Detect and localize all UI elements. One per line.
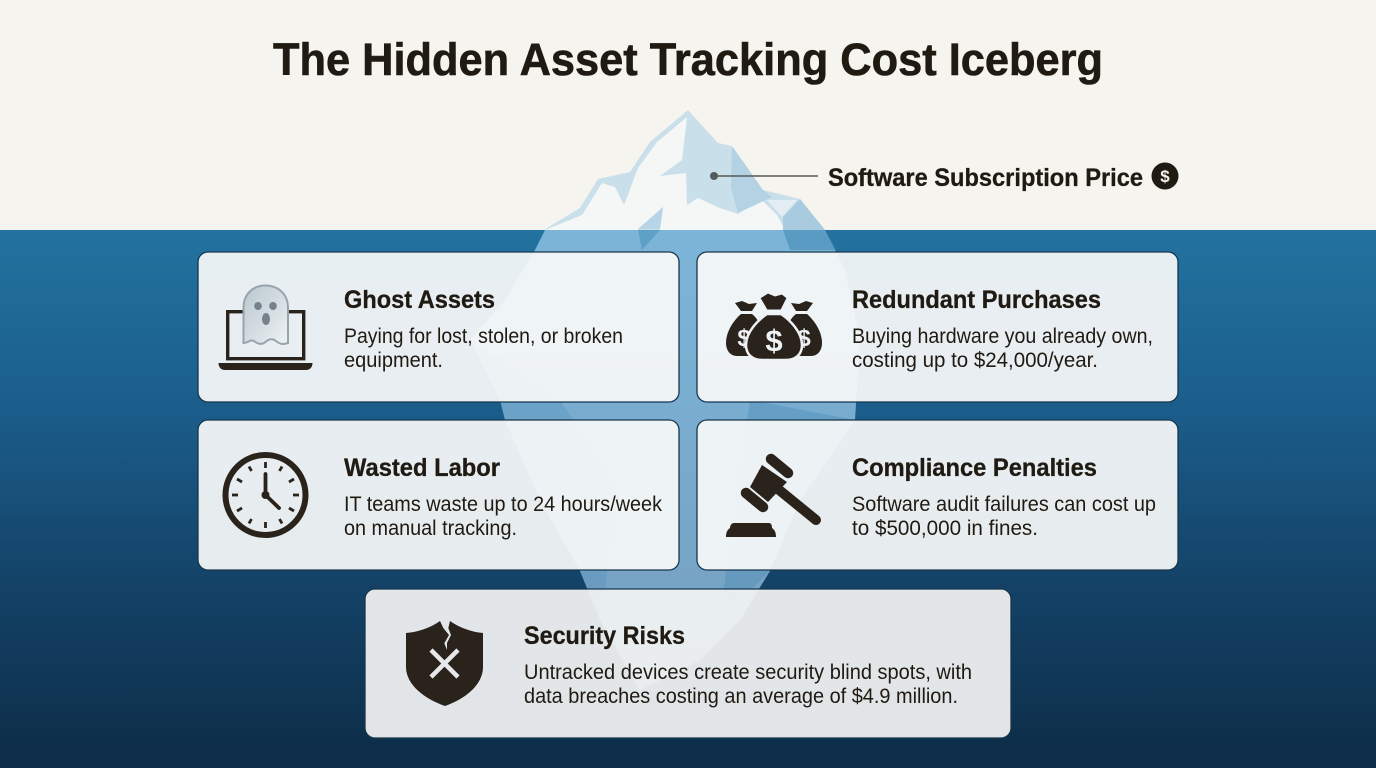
heading: compliance penalties: Compliance Penalties <box>852 454 1097 482</box>
heading: redundant purchases: Redundant Purchases <box>852 286 1101 314</box>
panel: security risks <box>365 589 1011 738</box>
sky background <box>0 0 1376 230</box>
icon: money bags: $ <box>797 325 811 352</box>
text: compliance penalties description: Software audit failures can cost up <box>852 492 1156 516</box>
icon: money bags <box>726 293 822 360</box>
panel: redundant purchases <box>697 252 1178 402</box>
heading: wasted labor: Wasted Labor <box>344 454 500 482</box>
heading: security risks: Security Risks <box>524 622 685 650</box>
panel: wasted labor <box>198 420 679 570</box>
text: wasted labor description: IT teams waste up to 24 hours/week <box>344 492 662 516</box>
icon: clock <box>226 455 306 535</box>
title: The Hidden Asset Tracking Cost Iceberg <box>273 34 1103 85</box>
callout label: Software Subscription Price <box>828 164 1143 192</box>
icon: dollar badge: $ <box>1160 167 1170 186</box>
callout: software subscription price <box>710 162 1178 192</box>
iceberg illustration <box>470 110 860 690</box>
callout dot and leader line <box>710 172 818 180</box>
panel: compliance penalties <box>697 420 1178 570</box>
icon: dollar badge <box>1152 162 1178 190</box>
panel: ghost assets <box>198 252 679 402</box>
iceberg above water <box>545 110 825 230</box>
ocean background <box>0 230 1376 768</box>
text: ghost assets description: equipment. <box>344 348 443 372</box>
icon: money bags: $ <box>765 323 783 358</box>
iceberg below water <box>470 230 860 690</box>
text: security risks description: data breaches costing an average of $4.9 million. <box>524 684 958 708</box>
icon: money bags: $ <box>737 325 751 352</box>
heading: ghost assets: Ghost Assets <box>344 286 495 314</box>
text: redundant purchases description: costing up to $24,000/year. <box>852 348 1098 372</box>
text: wasted labor description: on manual tracking. <box>344 516 517 540</box>
text: compliance penalties description: to $500,000 in fines. <box>852 516 1038 540</box>
icon: ghost over laptop <box>218 286 312 370</box>
icon: gavel <box>726 459 816 537</box>
icon: cracked shield <box>406 621 483 706</box>
text: redundant purchases description: Buying hardware you already own, <box>852 324 1153 348</box>
text: security risks description: Untracked devices create security blind spots, with <box>524 660 972 684</box>
text: ghost assets description: Paying for lost, stolen, or broken <box>344 324 623 348</box>
